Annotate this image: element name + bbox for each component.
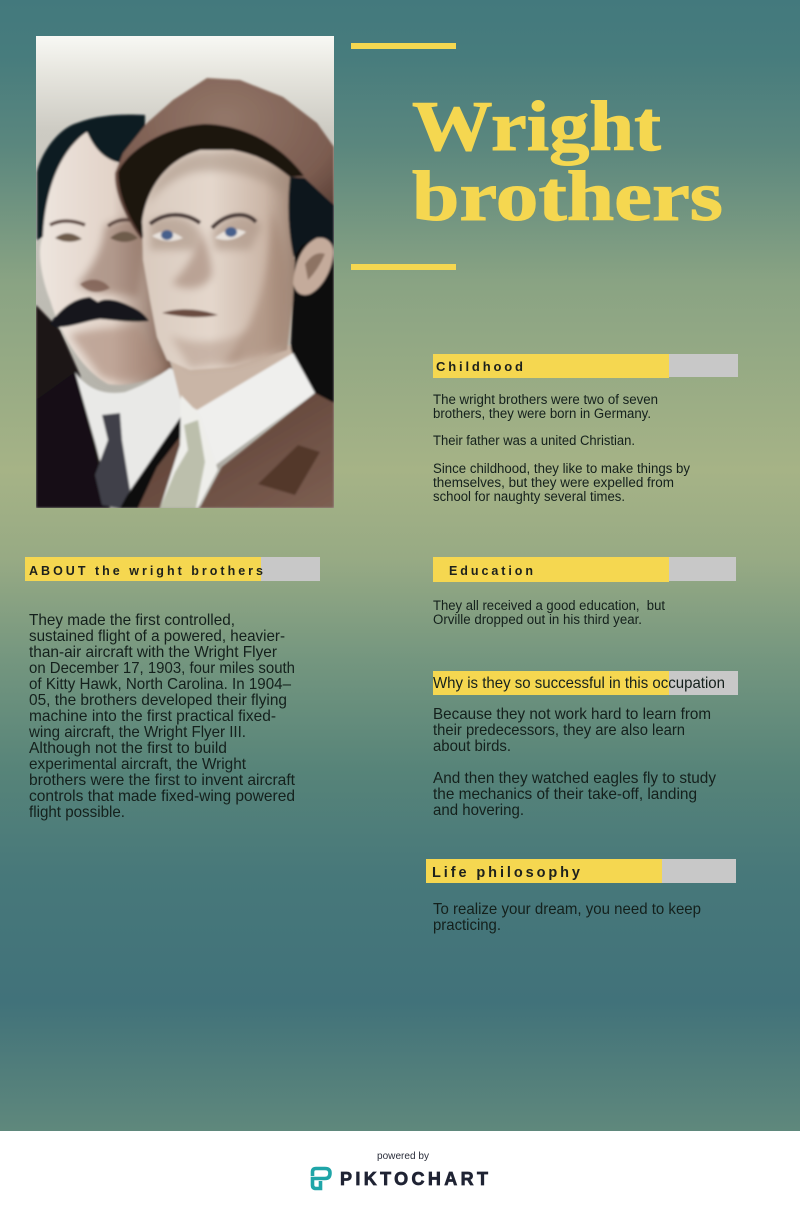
left brother: eyes [55,232,138,242]
text: childhood [433,392,690,504]
heading bar: childhood [433,354,738,378]
panel: childhood [433,354,738,504]
panel: life philosophy [426,859,736,934]
right brother: face [142,150,295,370]
panel: about the wright brothers [25,557,320,821]
photo: portrait of the Wright brothers [36,36,334,508]
right brother: brows [150,215,256,228]
text: childhood: themselves, but they were expelled from [433,475,674,490]
text: about: Although not the first to build [29,740,227,757]
text: about: flight possible. [29,804,125,821]
right brother: jacket [138,393,334,508]
heading bar: about [25,557,320,581]
text: about: sustained flight of a powered, heavier- [29,628,285,645]
dark backdrop [36,305,110,508]
right brother: shirt [160,395,218,508]
text: about [28,612,296,821]
left brother: collar and shirt [73,366,182,496]
heading bar: life philosophy: Life philosophy [432,865,580,881]
right brother: collar [180,353,315,467]
heading bar: childhood: Childhood [436,359,523,374]
text: why: about birds. [433,738,511,755]
text: childhood: The wright brothers were two of seven [433,392,658,407]
text: why [433,706,716,819]
text: education [433,598,665,627]
right brother: forehead shadow [146,152,288,205]
left brother: hair [37,115,145,240]
text: about: 05, the brothers developed their flying [29,692,287,709]
decorative line above title [351,43,456,49]
heading bar: education: Education [449,564,533,578]
text: life philosophy [433,901,701,934]
text: why: and hovering. [433,802,524,819]
left brother: suit [37,374,102,507]
text: life philosophy: practicing. [433,917,501,934]
panel: why they succeeded [433,671,738,819]
text: life philosophy: To realize your dream, you need to keep [433,901,701,918]
text: childhood: brothers, they were born in Germany. [433,406,651,421]
text: about: on December 17, 1903, four miles south [29,660,295,677]
heading bar: about: ABOUT the wright brothers [29,564,263,578]
right brother: cheek shading [222,210,287,364]
title: Wright [412,88,661,166]
right brother: ear [293,238,333,295]
left brother: nose and cheek shading [77,215,146,298]
left brother: mustache [50,297,149,327]
footer: powered by Piktochart [0,1131,800,1211]
heading bar: education [433,557,736,582]
title: brothers [412,158,723,236]
right brother: neck [170,345,293,412]
text: childhood: Since childhood, they like to make things by [433,461,690,476]
right brother: eyes [152,229,246,241]
text: about: brothers were the first to invent aircraft [29,772,296,789]
right brother: cap [115,78,334,240]
text: about: controls that made fixed-wing powered [29,788,295,805]
text: education: Orville dropped out in his third year. [433,612,642,627]
text: childhood: school for naughty several times. [433,489,625,504]
text: about: wing aircraft, the Wright Flyer III. [28,724,246,741]
text: about: experimental aircraft, the Wright [29,756,247,773]
left brother: face [40,132,172,385]
right brother: hair [286,175,334,258]
heading bar: life philosophy [426,859,736,883]
left brother: tie [95,413,130,508]
text: about: machine into the first practical fixed- [29,708,276,725]
right brother: tie [160,420,205,508]
text: education: They all received a good education, but [433,598,665,613]
icon: Piktochart logo [312,1168,330,1188]
text: why: And then they watched eagles fly to study [433,770,716,787]
text: childhood: Their father was a united Christian. [433,433,635,448]
right brother: nose shading [172,232,212,288]
footer text: powered by: powered by [377,1151,429,1162]
left brother: dark lapel [118,415,185,508]
left brother: chin shading [70,326,165,381]
text: why: their predecessors, they are also learn [433,722,685,739]
text: about: They made the first controlled, [29,612,235,629]
right brother: cap brim shadow [118,124,304,238]
decorative line below title [351,264,456,270]
heading bar: why: Why is they so successful in this occupation [433,675,725,692]
right brother: mouth [162,309,218,317]
right brother: eye socket shading [150,216,262,250]
text: about: of Kitty Hawk, North Carolina. In 1904– [29,676,291,693]
title [412,88,723,236]
panel: education [433,557,736,627]
text: why: Because they not work hard to learn from [433,706,711,723]
text: about: than-air aircraft with the Wright Flyer [29,644,278,661]
wordmark: Piktochart: PIKTOCHART [340,1169,488,1189]
right brother: chin shading [172,333,245,370]
heading bar: why [433,671,738,695]
text: why: the mechanics of their take-off, landing [433,786,697,803]
